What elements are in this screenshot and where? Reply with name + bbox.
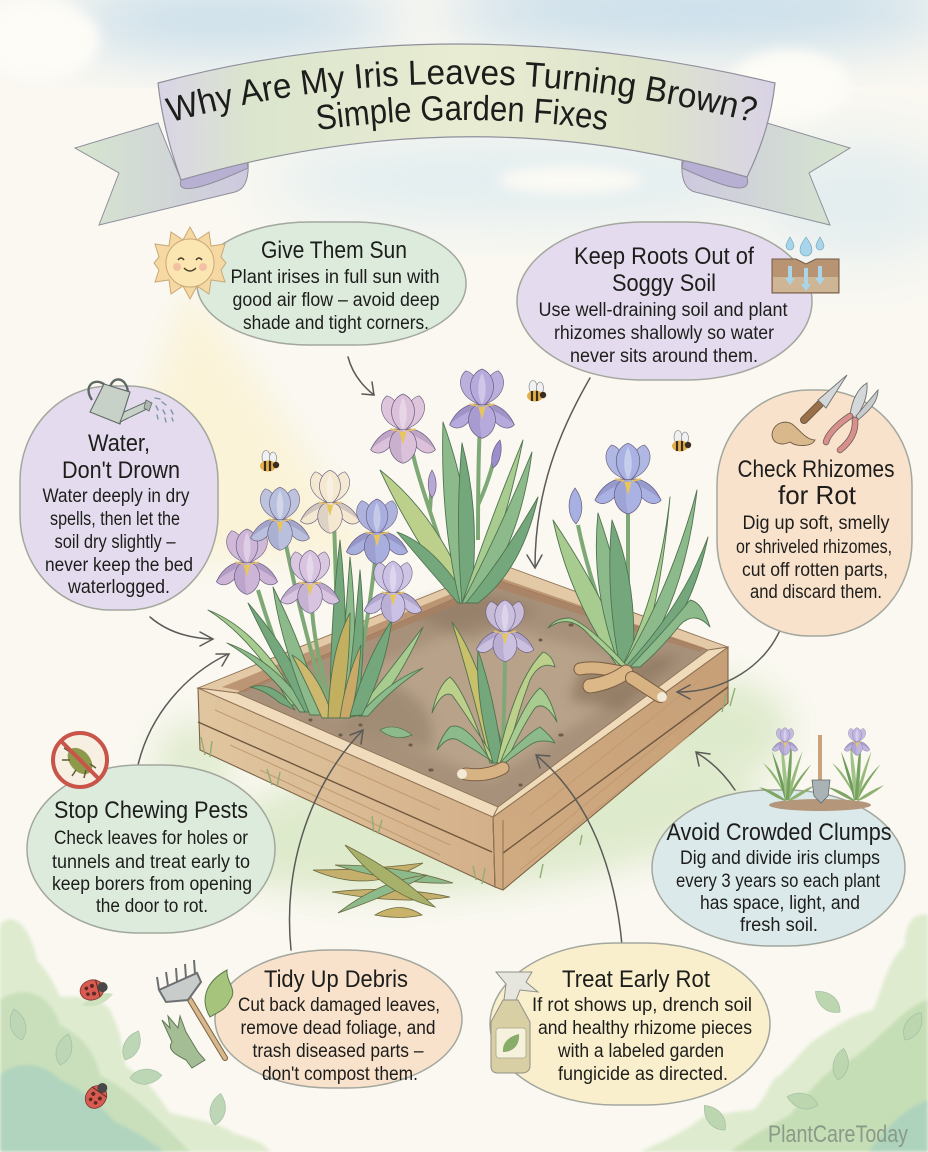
text: sun advice: Plant irises in full sun with bbox=[230, 267, 440, 288]
text: pest advice: the door to rot. bbox=[96, 896, 208, 917]
text: water advice: spells, then let the bbox=[50, 509, 180, 530]
heading: stop chewing pests: Stop Chewing Pests bbox=[54, 797, 248, 824]
arrow: water to left clump bbox=[150, 617, 213, 646]
bushes: lower right bbox=[640, 915, 928, 1152]
text: water advice: soil dry slightly – bbox=[54, 532, 176, 553]
icon: spray bottle bbox=[491, 972, 538, 1073]
text: sun advice: shade and tight corners. bbox=[243, 313, 429, 334]
text: tidy advice: trash diseased parts – bbox=[252, 1041, 424, 1062]
icon: knife, pruners and rhizome bbox=[772, 375, 878, 450]
banner main ribbon bbox=[158, 44, 775, 180]
ribbon banner bbox=[74, 43, 851, 226]
text: pest advice: keep borers from opening bbox=[52, 874, 252, 895]
text: crowded advice: has space, light, and bbox=[700, 893, 860, 914]
text: treat advice bbox=[532, 995, 752, 1085]
heading: keep roots bbox=[574, 243, 754, 297]
panel: avoid crowded clumps bbox=[652, 790, 905, 946]
heading: treat early rot: Treat Early Rot bbox=[562, 966, 710, 993]
text: treat advice: fungicide as directed. bbox=[558, 1064, 728, 1085]
arrow: sun to back clump bbox=[348, 357, 374, 395]
heading: check rhizomes: Check Rhizomes bbox=[738, 456, 894, 483]
text: water advice: never keep the bed bbox=[45, 555, 193, 576]
grass tufts bbox=[201, 688, 735, 884]
fallen leaf on soil bbox=[380, 727, 412, 738]
heading: water bbox=[62, 430, 180, 484]
text: rhizome advice: cut off rotten parts, bbox=[742, 560, 888, 581]
text: rhizome advice: Dig up soft, smelly bbox=[742, 513, 890, 534]
text: crowded advice: fresh soil. bbox=[740, 915, 818, 936]
pile of cut leaves bbox=[313, 845, 453, 918]
text: crowded advice: every 3 years so each plant bbox=[676, 871, 881, 892]
text: rhizome advice: or shriveled rhizomes, bbox=[736, 537, 892, 558]
iris clump: front centre bbox=[432, 600, 557, 779]
icon: rake, glove and leaf bbox=[157, 960, 233, 1068]
panel: give them sun bbox=[197, 222, 466, 345]
panel: water, don't drown bbox=[20, 386, 218, 610]
text: crowded advice bbox=[676, 848, 881, 936]
panel: check rhizomes bbox=[717, 390, 912, 636]
text: roots advice: rhizomes shallowly so water bbox=[554, 323, 775, 344]
heading: avoid crowded clumps: Avoid Crowded Clumps bbox=[666, 819, 892, 846]
text: pest advice bbox=[52, 828, 252, 917]
arrow: tidy to left clump bbox=[290, 730, 363, 950]
text: rhizome advice bbox=[736, 513, 892, 603]
text: treat advice: with a labeled garden bbox=[557, 1041, 724, 1062]
text: roots advice: never sits around them. bbox=[570, 346, 758, 367]
ladybugs bbox=[78, 770, 155, 1113]
heading: water: Don't Drown bbox=[62, 457, 180, 484]
text: roots advice bbox=[538, 300, 788, 367]
text: tidy advice: Cut back damaged leaves, bbox=[238, 995, 440, 1016]
heading: water: Water, bbox=[88, 430, 150, 457]
title: Simple Garden Fixes bbox=[318, 94, 607, 132]
icon: soil drainage bbox=[772, 237, 839, 293]
wood right face bbox=[493, 647, 728, 890]
wood top rim front bbox=[198, 688, 498, 817]
text: tidy advice: don't compost them. bbox=[262, 1064, 418, 1085]
heading: give them sun: Give Them Sun bbox=[261, 237, 407, 264]
icon: no pests sign bbox=[53, 733, 107, 787]
text: treat advice: If rot shows up, drench soil bbox=[532, 995, 752, 1016]
text: water advice: waterlogged. bbox=[67, 577, 170, 598]
bushes: lower left bbox=[0, 919, 270, 1152]
arrow: crowded to bed corner bbox=[696, 752, 735, 790]
heading: tidy up debris: Tidy Up Debris bbox=[264, 966, 408, 993]
arrow: roots to soil bbox=[527, 378, 590, 568]
text: water advice bbox=[42, 486, 193, 598]
text: tidy advice: remove dead foliage, and bbox=[240, 1018, 436, 1039]
title: Why Are My Iris Leaves Turning Brown? bbox=[164, 60, 757, 121]
iris clump: right bbox=[548, 443, 710, 702]
heading: keep roots: Soggy Soil bbox=[612, 270, 716, 297]
exposed rhizomes bbox=[580, 668, 667, 702]
heading: keep roots: Keep Roots Out of bbox=[574, 243, 754, 270]
text: treat advice: and healthy rhizome pieces bbox=[538, 1018, 752, 1039]
icon: watering can bbox=[89, 379, 173, 424]
banner left tail bbox=[75, 123, 248, 225]
text: pest advice: tunnels and treat early to bbox=[52, 852, 250, 873]
panel: keep roots out of soggy soil bbox=[517, 222, 812, 380]
heading: check rhizomes bbox=[738, 456, 894, 510]
arrows bbox=[138, 357, 780, 950]
text: water advice: Water deeply in dry bbox=[42, 486, 190, 507]
wood left face bbox=[198, 688, 495, 887]
icon: divided iris clumps with trowel bbox=[759, 728, 884, 811]
text: crowded advice: Dig and divide iris clumps bbox=[680, 848, 880, 869]
wood back rim bbox=[198, 565, 728, 693]
soil bbox=[225, 572, 716, 812]
iris clump: left with brown leaves bbox=[208, 470, 423, 718]
text: sun advice bbox=[230, 267, 440, 334]
text: sun advice: good air flow – avoid deep bbox=[232, 290, 440, 311]
arrow: rhizomes to exposed rhizome bbox=[677, 630, 780, 699]
front rhizome bbox=[457, 768, 503, 779]
iris clump: back centre bbox=[371, 369, 538, 603]
panel: treat early rot bbox=[490, 943, 770, 1105]
raised garden bed bbox=[198, 565, 735, 890]
heading: check rhizomes: for Rot bbox=[778, 480, 857, 510]
bees bbox=[260, 380, 691, 472]
banner right tail bbox=[682, 123, 850, 225]
panel: stop chewing pests bbox=[27, 765, 275, 933]
text: pest advice: Check leaves for holes or bbox=[54, 828, 249, 849]
text: roots advice: Use well-draining soil and plant bbox=[538, 300, 788, 321]
arrow: treat to front rhizome bbox=[536, 755, 622, 945]
icon: smiling sun bbox=[154, 227, 226, 299]
panel: tidy up debris bbox=[215, 950, 462, 1088]
text: rhizome advice: and discard them. bbox=[750, 582, 882, 603]
arrow: pests to left clump bbox=[138, 654, 229, 765]
text: tidy advice bbox=[238, 995, 440, 1085]
